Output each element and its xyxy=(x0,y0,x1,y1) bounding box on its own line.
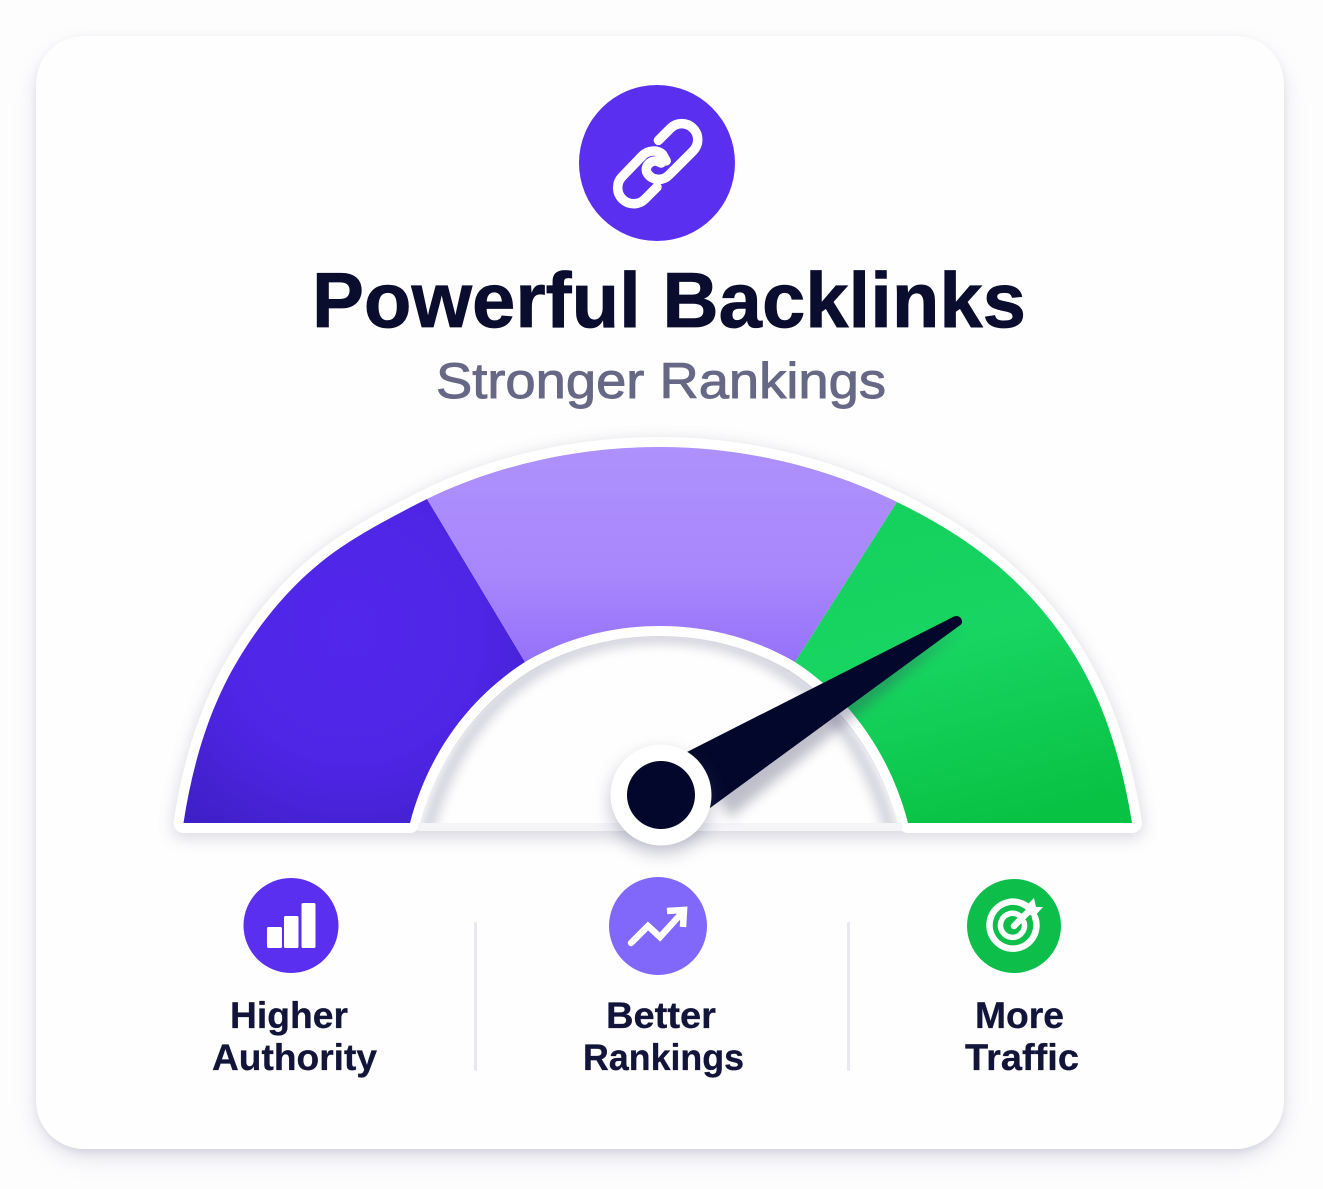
gauge baseline xyxy=(418,823,902,831)
gauge xyxy=(184,447,1132,860)
needle shadow xyxy=(700,628,962,818)
gauge segment: dark purple xyxy=(184,499,525,823)
item: higher authority xyxy=(212,878,377,1078)
hub shadow xyxy=(611,753,711,853)
icon: target xyxy=(967,879,1061,973)
divider left xyxy=(474,922,477,1071)
label: better rankings xyxy=(583,995,744,1078)
gauge white border xyxy=(184,447,1132,823)
item: better rankings xyxy=(583,877,744,1078)
label: better rankings: Better xyxy=(606,995,716,1036)
gauge segment: green xyxy=(795,502,1132,823)
label: more traffic: More xyxy=(975,995,1064,1036)
subtitle: Stronger Rankings xyxy=(436,353,886,409)
icon: trend arrow xyxy=(609,877,707,975)
divider right xyxy=(847,922,850,1071)
item: more traffic xyxy=(965,879,1079,1078)
label: higher authority xyxy=(212,995,377,1078)
needle xyxy=(687,616,962,808)
label: higher authority: Authority xyxy=(212,1037,377,1078)
gauge inner hole xyxy=(420,641,898,823)
hub xyxy=(610,744,712,846)
label: higher authority: Higher xyxy=(230,995,348,1036)
gauge segment: light purple xyxy=(427,447,897,662)
icon: bars xyxy=(244,878,338,973)
label: more traffic xyxy=(965,995,1079,1078)
icon: chain link badge xyxy=(579,85,735,241)
gauge outer shadow xyxy=(184,451,1132,827)
label: more traffic: Traffic xyxy=(965,1037,1079,1078)
title: Powerful Backlinks xyxy=(312,256,1026,344)
label: better rankings: Rankings xyxy=(583,1037,744,1078)
